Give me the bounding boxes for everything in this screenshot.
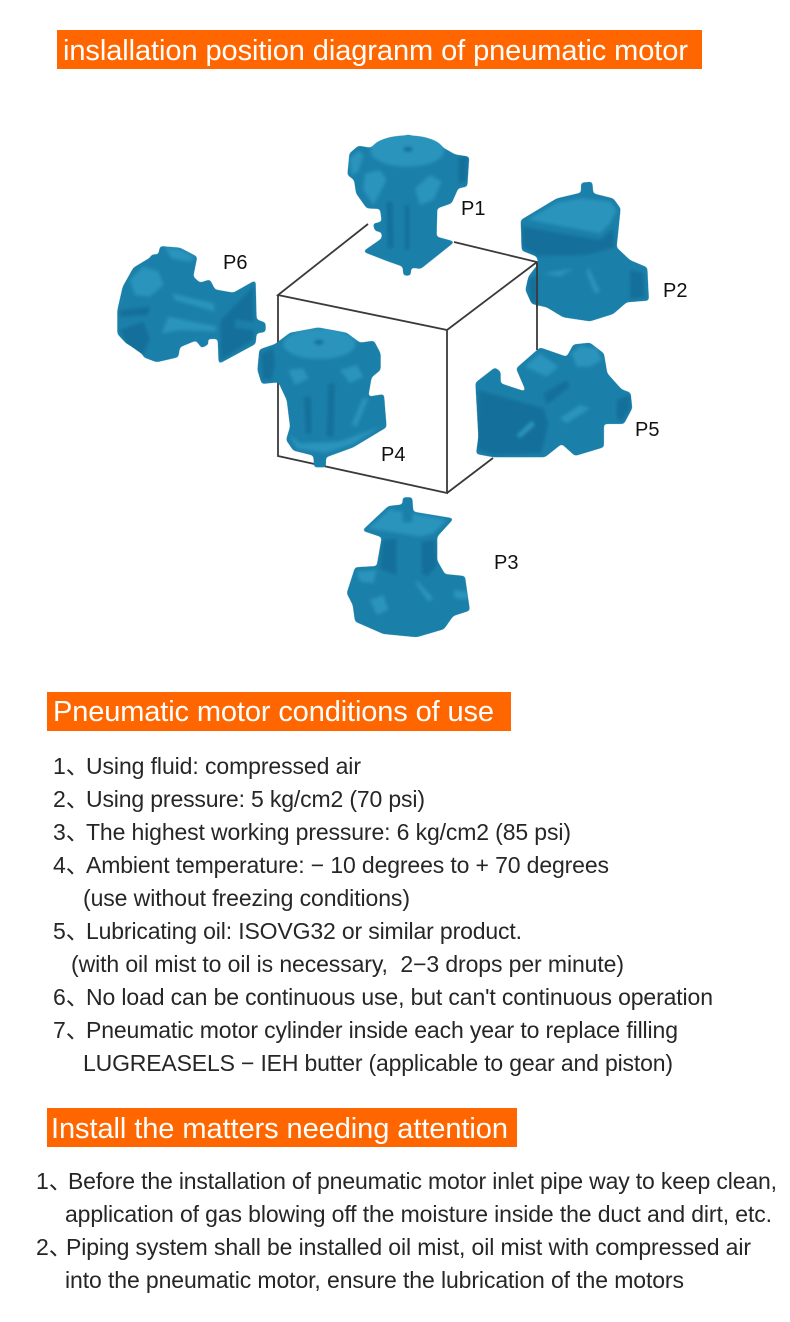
- text block: conditions list: Using fluid: compressed air: [86, 753, 361, 779]
- text block: conditions list: Pneumatic motor cylinder inside each year to replace filling: [86, 1017, 678, 1043]
- motor P4: [257, 327, 387, 467]
- text block: conditions list: 3、: [53, 819, 89, 845]
- text block: conditions list: No load can be continuous use, but can't continuous operation: [86, 984, 713, 1010]
- heading: installation notes: Install the matters needing attention: [51, 1113, 508, 1145]
- text block: conditions list: LUGREASELS − IEH butter (applicable to gear and piston): [83, 1050, 673, 1076]
- text block: installation notes list: Before the installation of pneumatic motor inlet pipe way to keep clean,: [68, 1168, 777, 1194]
- text block: conditions list: The highest working pressure: 6 kg/cm2 (85 psi): [86, 819, 571, 845]
- motor P3: [347, 497, 470, 637]
- heading: conditions of use: Pneumatic motor conditions of use: [53, 696, 494, 728]
- text block: conditions list: Using pressure: 5 kg/cm2 (70 psi): [86, 786, 425, 812]
- text block: conditions list: Ambient temperature: − 10 degrees to + 70 degrees: [86, 852, 609, 878]
- motor P1: [347, 134, 469, 276]
- motor P5: [475, 343, 632, 457]
- text block: installation notes list: into the pneumatic motor, ensure the lubrication of the motors: [65, 1267, 684, 1293]
- label P3: P3: [494, 552, 518, 574]
- text block: conditions list: Lubricating oil: ISOVG32 or similar product.: [86, 918, 522, 944]
- text block: conditions list: 6、: [53, 984, 89, 1010]
- text block: conditions list: (use without freezing conditions): [83, 885, 410, 911]
- motor P2: [521, 182, 649, 321]
- text block: conditions list: (with oil mist to oil is necessary, 2−3 drops per minute): [71, 951, 624, 977]
- text block: conditions list: [53, 753, 713, 1076]
- cube edge over motor P2: [536, 262, 538, 307]
- text block: installation notes list: Piping system shall be installed oil mist, oil mist with compressed air: [66, 1234, 751, 1260]
- label P5: P5: [635, 419, 659, 441]
- text block: conditions list: 2、: [53, 786, 89, 812]
- heading: installation position diagram: inslallation position diagranm of pneumatic motor: [63, 35, 688, 67]
- diagram: cube with six motor positions: [117, 134, 687, 637]
- text block: conditions list: 4、: [53, 852, 89, 878]
- label P6: P6: [223, 252, 247, 274]
- label P1: P1: [461, 198, 485, 220]
- label P2: P2: [663, 280, 687, 302]
- text block: installation notes list: 1、: [36, 1168, 72, 1194]
- text block: conditions list: 1、: [53, 753, 89, 779]
- text block: installation notes list: application of gas blowing off the moisture inside the duct and dirt, etc.: [65, 1201, 772, 1227]
- text block: conditions list: 7、: [53, 1017, 89, 1043]
- wireframe cube: [278, 224, 537, 493]
- text block: conditions list: 5、: [53, 918, 89, 944]
- text block: installation notes list: [36, 1168, 777, 1293]
- text block: installation notes list: 2、: [36, 1234, 72, 1260]
- motor P6: [117, 246, 266, 364]
- label P4: P4: [381, 444, 405, 466]
